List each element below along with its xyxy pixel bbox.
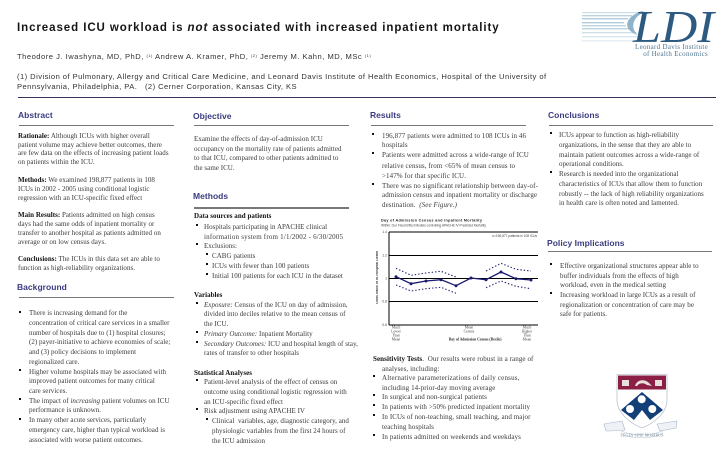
affiliations: Pennsylvania, Philadelphia, PA. (2) Cerner Corporation, Kansas City, KS (17, 82, 297, 91)
policy bullet list (550, 262, 699, 318)
policy bullet list: buffer individuals from the effects of high (560, 272, 679, 280)
objective text: to that ICU, compared to other patients admitted to (194, 154, 338, 162)
statistical analyses: the ICU admission (212, 437, 265, 445)
conclusions bullet list: robustly -- the lack of high reliability organizations (559, 190, 704, 198)
policy bullet list: regionalization or concentration of care may be (560, 301, 694, 309)
conclusions bullet list: characteristics of ICUs that allow them to function (559, 180, 702, 188)
abstract text: Main Results: Patients admitted on high census (18, 211, 155, 219)
results bullet list: relative census, from <65% of mean census to (382, 162, 515, 170)
background bullet list: number of hospitals due to (1) hospital closures; (29, 329, 166, 337)
data sources and patients: Hospitals participating in APACHE clinical (204, 223, 327, 231)
affiliations (17, 72, 547, 91)
authors: Theodore J. Iwashyna, MD, PhD, (1) Andrew A. Kramer, PhD, (2) Jeremy M. Kahn, MD, MSc (1) (17, 52, 371, 61)
y-axis ticks: 1.4 (382, 230, 387, 234)
x-axis labels: Mean (392, 338, 400, 342)
conclusions bullet list: operational conditions. (559, 160, 624, 168)
x-axis labels: Census (464, 330, 475, 334)
x-axis labels: Than (392, 334, 400, 338)
panel: methods (193, 191, 358, 445)
y-axis ticks: 1.2 (382, 254, 387, 258)
panel: sensitivity tests: teaching hospitals (382, 423, 434, 431)
data sources and patients: Exclusions: (204, 242, 237, 250)
results bullet list: admission census and inpatient mortality or discharge (382, 191, 537, 199)
abstract text: transfer to another hospital as patients admitted on (18, 229, 161, 237)
x-axis labels: Much (523, 326, 531, 330)
data sources and patients: Data sources and patients (194, 212, 271, 220)
background bullet list: (2) payer-initiative to achieve economies of scale; (29, 338, 170, 346)
objective text: the same ICU. (194, 164, 235, 172)
x-axis labels: Lower (391, 330, 402, 334)
statistical analyses: Risk adjustment using APACHE IV (204, 407, 305, 415)
abstract text: average or on low census days. (18, 238, 106, 246)
panel: sensitivity tests: In patients admitted on weekends and weekdays (382, 433, 521, 441)
x-axis labels: Much (392, 326, 400, 330)
logo: Leonard Davis Institute (582, 8, 717, 58)
affiliations: (1) Division of Pulmonary, Allergy and Critical Care Medicine, and Leonard Davis Institute of Health Economics, Hospital of the University of (17, 72, 547, 81)
gridlines and axes (389, 232, 538, 325)
y-axis ticks: 0.8 (382, 300, 387, 304)
background bullet list: Higher volume hospitals may be associated with (29, 368, 166, 376)
data sources and patients: Initial 100 patients for each ICU in the dataset (212, 272, 343, 280)
statistical analyses: an ICU-specific fixed effect (204, 398, 283, 406)
panel: sensitivity tests: analyses, including: (382, 365, 439, 373)
annotation: sample size: n=196,877 patients in 108 ICUs (492, 234, 537, 238)
chart: day of admission census and inpatient mortality (376, 218, 538, 342)
panel: sensitivity tests: Alternative parameterizations of daily census, (382, 374, 520, 382)
abstract text: days had the same odds of inpatient mortality or (18, 220, 154, 228)
results bullet list: destination. (See Figure.) (382, 201, 457, 209)
panel: policy implications (547, 238, 712, 318)
variables: the ICU. (204, 320, 228, 328)
icon: University of Pennsylvania shield: LEGES SINE MORIBUS (620, 434, 664, 438)
background bullet list: emergency care, higher than typical workload is (29, 426, 165, 434)
background bullet list: improved patient outcomes for many critical (29, 377, 155, 385)
data sources and patients: information system from 1/1/2002 - 6/30/2005 (204, 233, 343, 241)
panel: background (17, 282, 174, 444)
heading: background: Background (17, 282, 67, 292)
conclusions bullet list: maintain patient outcomes across a wide-range of (559, 151, 699, 159)
variables: Secondary Outcomes: ICU and hospital length of stay, (204, 340, 358, 348)
results bullet list: Patients were admitted across a wide-range of ICU (382, 151, 529, 159)
abstract text: on patients within the ICU. (18, 158, 95, 166)
policy bullet list: safe for patients. (560, 310, 607, 318)
abstract text: function as high-reliability organizations. (18, 264, 135, 272)
data sources and patients (194, 212, 343, 280)
background bullet list: concentration of critical care services in a smaller (29, 319, 170, 327)
lower confidence bound (396, 281, 531, 293)
heading: methods: Methods (193, 191, 228, 201)
background bullet list (19, 309, 170, 444)
abstract text: Conclusions: The ICUs in this data set are able to (18, 255, 160, 263)
title: Increased ICU workload is not associated with increased inpatient mortality (17, 22, 500, 34)
upper confidence bound (396, 263, 531, 277)
policy bullet list: Increasing workload in large ICUs as a result of (560, 291, 695, 299)
logo: Leonard Davis Institute: of Health Economics (643, 50, 708, 58)
abstract text: patient volume may achieve better outcomes, there (18, 141, 162, 149)
background bullet list: performance is unknown. (29, 406, 101, 414)
abstract text: Methods: We examined 198,877 patients in 108 (18, 176, 155, 184)
logo: Leonard Davis Institute: Leonard Davis Institute (635, 43, 708, 51)
abstract text: regression with an ICU-specific fixed effect (18, 194, 142, 202)
abstract text: ICUs in 2002 - 2005 using conditional logistic (18, 185, 149, 193)
background bullet list: and (3) policy decisions to implement (29, 348, 136, 356)
conclusions bullet list: ICUs appear to function as high-reliability (559, 131, 679, 139)
variables: rates of transfer to other hospitals (204, 349, 299, 357)
results bullet list (372, 132, 538, 209)
objective text: Examine the effects of day-of-admission ICU (194, 135, 323, 143)
objective text: occupancy on the mortality rate of patients admitted (194, 145, 342, 153)
statistical analyses: outcome using conditional logistic regression with (204, 388, 347, 396)
statistical analyses (194, 369, 349, 445)
conclusions bullet list: in health care is often noted and lamented. (559, 199, 679, 207)
background bullet list: associated with worse patient outcomes. (29, 436, 143, 444)
objective text (194, 135, 342, 172)
chart subtitle: Within: Our Fixed Effect Models controlling APACHE IV Predicted Mortality (381, 224, 486, 228)
panel: sensitivity tests: In surgical and non-surgical patients (382, 393, 487, 401)
heading: policy implications: Policy Implications (547, 238, 625, 248)
x-axis labels: Mean (465, 326, 473, 330)
background bullet list: regionalized care. (29, 358, 79, 366)
variables: Variables (194, 291, 222, 299)
background bullet list: care services. (29, 387, 67, 395)
y-axis ticks: 1 (385, 276, 387, 280)
odds ratio line (395, 271, 532, 287)
y-axis ticks: 0.6 (382, 323, 387, 327)
panel: objective (193, 111, 349, 172)
x-axis labels (391, 326, 533, 342)
policy bullet list: workload, even in the medical setting (560, 281, 666, 289)
heading: results: Results (370, 110, 401, 120)
heading: objective: Objective (193, 111, 232, 121)
panel: sensitivity tests (373, 355, 534, 441)
background bullet list: There is increasing demand for the (29, 309, 127, 317)
statistical analyses: physiologic variables from the first 24 hours of (212, 427, 345, 435)
conclusions bullet list: organizations, in the sense that they are able to (559, 141, 691, 149)
abstract text: Rationale: Although ICUs with higher overall (18, 132, 150, 140)
variables: Primary Outcome: Inpatient Mortality (204, 330, 313, 338)
data sources and patients: ICUs with fewer than 100 patients (212, 262, 309, 270)
x-axis labels: Than (523, 334, 531, 338)
results bullet list: There was no significant relationship between day-of- (382, 182, 538, 190)
background bullet list: In many other acute services, particularly (29, 416, 146, 424)
y-axis ticks (382, 230, 387, 327)
statistical analyses: Clinical variables, age, diagnostic category, and (212, 417, 349, 425)
policy bullet list: Effective organizational structures appear able to (560, 262, 699, 270)
chart title: Day of Admission Census and Inpatient Mortality (381, 218, 483, 222)
panel: conclusions (548, 110, 713, 207)
heading: abstract: Abstract (18, 110, 53, 120)
background bullet list: The impact of increasing patient volumes on ICU (29, 397, 170, 405)
statistical analyses: Statistical Analyses (194, 369, 252, 377)
abstract text (18, 132, 169, 272)
panel: sensitivity tests: In patients with >50% predicted inpatient mortality (382, 403, 530, 411)
results bullet list: hospitals (382, 141, 408, 149)
variables: Exposure: Census of the ICU on day of admission, (204, 301, 348, 309)
data sources and patients: CABG patients (212, 252, 255, 260)
abstract text: are few data on the effects of increasing patient loads (18, 149, 169, 157)
panel: sensitivity tests: Sensitivity Tests. Our results were robust in a range of (373, 355, 533, 363)
variables (194, 291, 358, 357)
panel: sensitivity tests: including 14-prior-day moving average (382, 384, 495, 392)
panel: sensitivity tests: In ICUs of non-teaching, small teaching, and major (382, 413, 531, 421)
conclusions bullet list (550, 131, 704, 207)
results bullet list: >147% for that specific ICU. (382, 172, 466, 180)
panel: abstract (18, 110, 174, 272)
panel: results (370, 110, 538, 209)
heading: conclusions: Conclusions (548, 110, 599, 120)
x-axis labels: Day of Admission Census (Decile) (449, 338, 502, 342)
icon: University of Pennsylvania shield (604, 374, 678, 438)
statistical analyses: Patient-level analysis of the effect of census on (204, 378, 337, 386)
variables: divided into deciles relative to the mean census of (204, 310, 346, 318)
x-axis labels: Mean (523, 338, 531, 342)
x-axis labels: Higher (522, 330, 533, 334)
results bullet list: 196,877 patients were admitted to 108 ICUs in 46 (382, 132, 526, 140)
conclusions bullet list: Research is needed into the organizational (559, 170, 679, 178)
